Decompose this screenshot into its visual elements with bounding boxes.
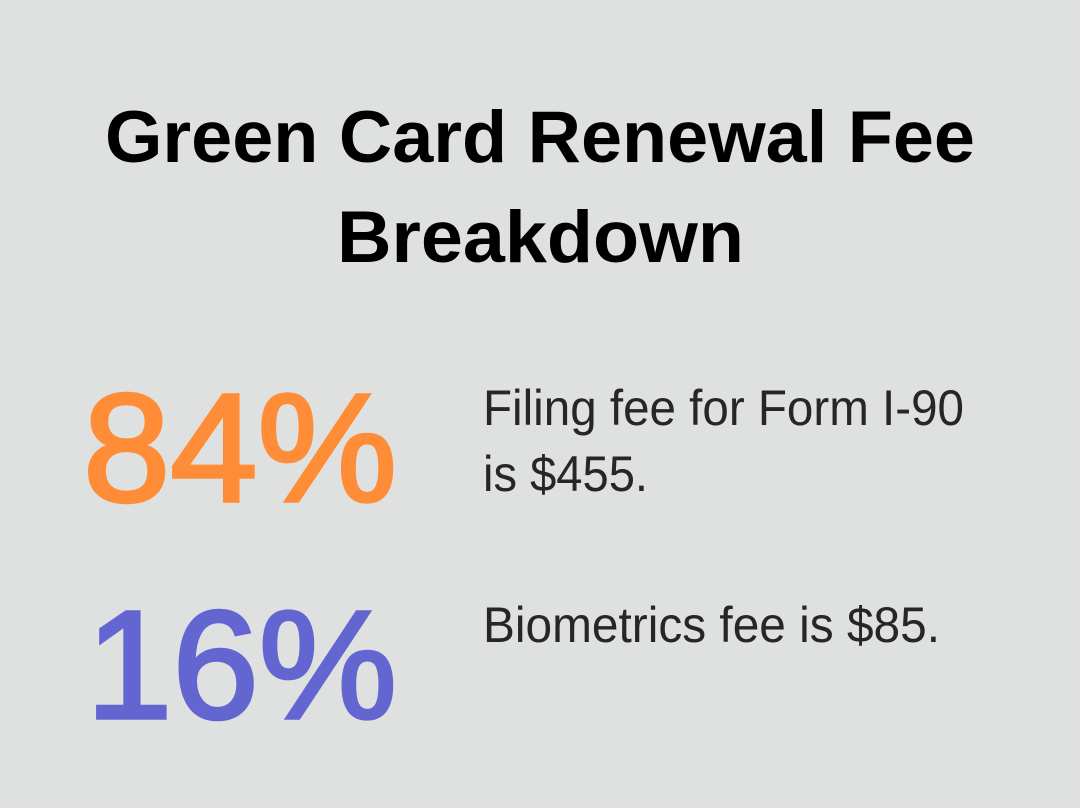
stat: 16 percent: 16%: [86, 579, 397, 751]
title: [105, 97, 975, 278]
description: filing fee: [483, 380, 964, 502]
description: filing fee: Filing fee for Form I-90: [483, 380, 964, 436]
description: filing fee: is $455.: [483, 446, 648, 502]
title: Green Card Renewal Fee: [105, 97, 975, 178]
description: biometrics fee: Biometrics fee is $85.: [483, 597, 940, 653]
title: Breakdown: [337, 197, 744, 278]
stat: 84 percent: 84%: [83, 362, 397, 534]
